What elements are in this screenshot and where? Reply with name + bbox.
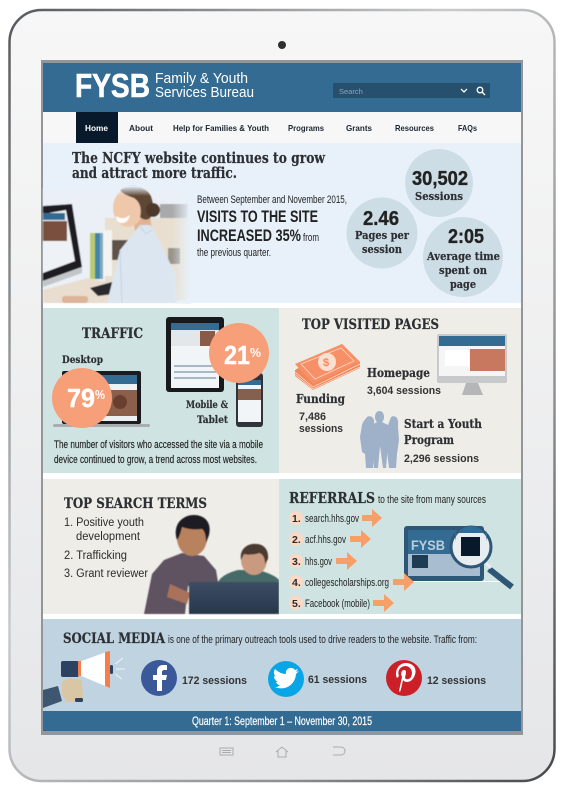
search box [333,83,490,98]
item: start a youth program [404,417,482,465]
panel: social media [43,619,521,711]
label: mobile and tablet: Tablet [197,414,228,426]
item: pinterest: 12 sessions [427,675,486,687]
footer bar: Quarter 1: September 1 – November 30, 2015 [192,714,372,728]
photo: two men at laptop [144,515,279,614]
item: start a youth program: 2,296 sessions [404,453,479,465]
item 4: 4. [292,577,301,589]
screen frame [41,60,523,735]
panel: top visited pages [279,308,521,473]
search box: Search [339,87,363,96]
list: 1. Positive youth [64,517,144,529]
stat: 21 percent: 21 [224,340,250,370]
item: start a youth program: Program [404,433,454,447]
logo: FYSB [75,67,150,104]
item: facebook [141,660,247,696]
stat: sessions: 30,502 [412,168,468,190]
stat: average time: 2:05 [448,226,484,248]
icon: megaphone [43,651,125,708]
device buttons [220,747,345,757]
stat: 79 percent: 79 [67,383,95,413]
icon: home button [276,747,288,757]
list: 3. Grant reviewer [64,568,148,580]
navigation bar: Home [85,123,108,133]
logo: Services Bureau [155,85,254,101]
item 3: hhs.gov [305,556,332,568]
icon: tablet device [166,317,224,392]
stat: 79 percent: % [95,387,105,402]
stat: 79 percent [52,368,112,428]
body text: INCREASED 35% [197,226,301,245]
icon: desktop monitor [437,334,507,395]
heading: and attract more traffic. [72,164,237,182]
body text: the previous quarter. [197,247,271,259]
item 5: 5. [292,598,301,610]
heading: TOP SEARCH TERMS [64,496,207,512]
stat: pages per session: 2.46 [363,208,399,230]
stat: pages per session: session [362,243,402,256]
icon: money stack [295,344,360,390]
text block [54,439,263,466]
footer bar [43,711,521,731]
item 3 [289,552,357,570]
item: funding: Funding [296,392,346,406]
heading: REFERRALS [289,489,375,507]
stat: pages per session [346,198,418,268]
body text: Between September and November 2015, [197,194,347,206]
navigation bar: About [129,123,153,133]
illustration: site under magnifier [404,526,512,587]
label: desktop: Desktop [62,354,103,366]
item 4: collegescholarships.org [305,577,389,589]
stat: sessions [405,149,473,217]
site header [43,63,521,112]
heading: to the site from many sources [378,494,486,506]
item: pinterest [386,660,486,696]
stat: average time: Average time [426,250,500,263]
icon: back button [333,747,345,755]
logo [75,67,254,104]
icon: laptop [53,371,150,427]
screen background [43,63,521,731]
list [64,517,148,580]
item 2: 2. [292,534,301,546]
icon: camera [278,41,286,49]
heading: TOP VISITED PAGES [302,317,439,333]
item 2: acf.hhs.gov [305,534,346,546]
item: homepage: 3,604 sessions [367,385,441,397]
item 3: 3. [292,556,301,568]
navigation bar [43,112,521,143]
item: funding [296,392,346,435]
text block: The number of visitors who accessed the site via a mobile [54,439,263,451]
stat: pages per session: Pages per [355,229,409,242]
item: funding: sessions [299,423,343,435]
navigation bar: FAQs [458,123,477,133]
navigation bar: Help for Families & Youth [173,123,269,133]
icon: phone [236,373,263,427]
navigation bar: Programs [288,123,324,133]
stat: average time: spent on [439,264,487,277]
heading: The NCFY website continues to grow [72,149,326,167]
panel: referrals [279,479,521,614]
body text [197,194,347,259]
stat: average time: page [450,278,476,291]
item 5: Facebook (mobile) [305,598,370,610]
heading [72,149,326,182]
heading [289,489,486,507]
label: mobile and tablet: Mobile & [186,399,228,411]
heading: TRAFFIC [82,326,143,342]
logo: Family & Youth [155,71,248,87]
text block: device continued to grow, a trend across most websites. [54,454,257,466]
icon: money stack: $ [323,357,329,369]
panel: top search terms [43,479,279,614]
item 4 [289,573,414,591]
stat: 21 percent [209,323,269,383]
label: mobile and tablet [186,399,228,426]
item 1: 1. [292,513,301,525]
navigation bar: Grants [346,123,372,133]
item: twitter: 61 sessions [308,674,367,686]
icon: people silhouettes [360,411,399,468]
icon: menu button [220,748,233,755]
item: start a youth program: Start a Youth [404,417,482,431]
item 2 [289,530,371,548]
list: development [76,531,141,543]
stat: average time [423,217,503,297]
body text: from [303,232,319,244]
photo: woman at computer [43,186,191,304]
item: twitter [268,661,367,697]
item: funding: 7,486 [299,411,326,423]
navigation bar: Resources [395,123,434,133]
heading [63,631,477,647]
panel: traffic [43,308,279,473]
body text: VISITS TO THE SITE [197,207,318,226]
panel: hero [43,143,521,304]
item: homepage [367,366,441,397]
heading: SOCIAL MEDIA [63,631,165,647]
stat: sessions: Sessions [415,190,463,203]
item: facebook: 172 sessions [182,675,247,687]
item 1 [289,509,382,527]
item: homepage: Homepage [367,366,430,380]
item 1: search.hhs.gov [305,513,359,525]
list: 2. Trafficking [64,550,127,562]
illustration: site under magnifier: FYSB [411,537,445,553]
item 5 [289,594,394,612]
stat: 21 percent: % [250,345,261,360]
